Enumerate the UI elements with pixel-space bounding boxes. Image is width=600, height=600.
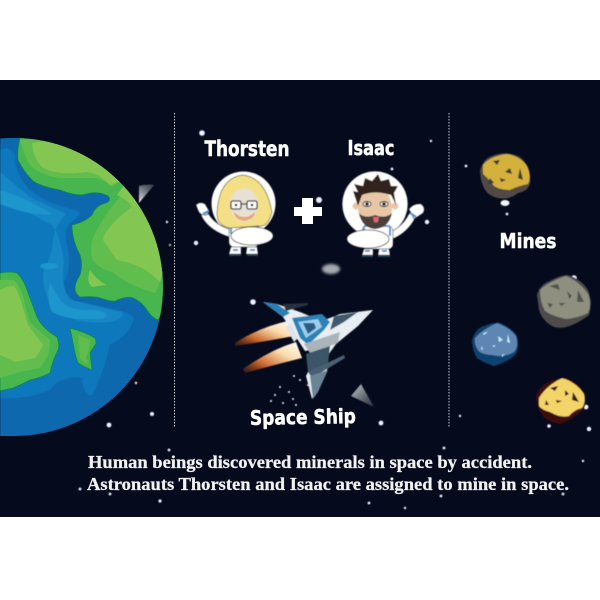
stars xyxy=(79,130,591,509)
ocean xyxy=(0,136,166,438)
panel: space background xyxy=(0,80,600,517)
dotted dividers xyxy=(174,113,449,427)
caption line 1: Human beings discovered minerals in space by accident. xyxy=(88,452,532,472)
caption line 2: Astronauts Thorsten and Isaac are assigned to mine in space. xyxy=(87,474,569,494)
astronaut: Isaac xyxy=(342,172,424,256)
continent: west xyxy=(0,272,59,391)
comet shards xyxy=(139,185,510,407)
mine: gray asteroid xyxy=(537,275,591,328)
space ship xyxy=(235,302,373,399)
plus sign xyxy=(294,198,322,224)
heading: Isaac: Isaac xyxy=(348,136,394,160)
mine: yellow asteroid xyxy=(480,153,530,198)
caption xyxy=(87,452,569,494)
earth xyxy=(0,136,175,438)
engine flames xyxy=(235,321,294,346)
fuselage xyxy=(263,302,373,399)
mine: gold asteroid xyxy=(536,378,585,424)
astronaut: Thorsten xyxy=(196,172,276,255)
heading: Thorsten: Thorsten xyxy=(204,137,290,161)
heading: Space Ship: Space Ship xyxy=(250,404,356,430)
mine: blue asteroid xyxy=(472,323,518,366)
island xyxy=(70,328,96,370)
continent: north xyxy=(18,136,175,320)
heading: Mines: Mines xyxy=(500,229,556,253)
